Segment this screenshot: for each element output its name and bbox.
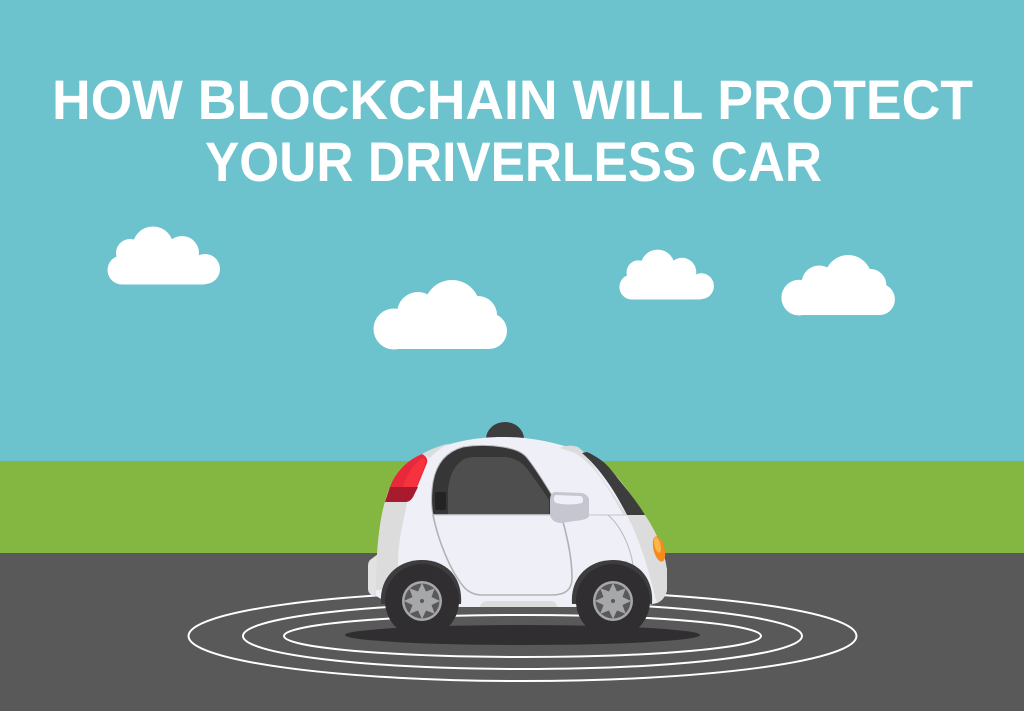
windshield	[582, 452, 645, 515]
title: YOUR DRIVERLESS CAR	[205, 130, 822, 193]
green grass band	[0, 461, 1024, 553]
cloud 3	[619, 250, 714, 299]
rear grey panel	[376, 502, 407, 590]
sky background	[0, 0, 1024, 462]
side window glass	[448, 457, 549, 515]
front panel seam	[608, 515, 633, 565]
door handle	[435, 492, 446, 510]
side window frame	[432, 446, 553, 515]
side step	[480, 601, 557, 607]
side mirror	[550, 492, 589, 523]
driverless car	[368, 422, 667, 638]
hood grey accent	[560, 446, 627, 515]
asphalt road	[0, 553, 1024, 711]
door outline	[433, 515, 572, 595]
rear bumper	[368, 554, 395, 600]
car shadow	[345, 625, 700, 645]
cloud 1	[108, 226, 220, 284]
front indicator light	[651, 535, 667, 563]
front grey panel	[627, 515, 667, 603]
roof sensor dome	[486, 422, 524, 456]
taillight	[385, 454, 427, 502]
cloud 4	[781, 255, 895, 315]
sensor rings on road	[188, 591, 856, 681]
title	[52, 68, 973, 193]
beltline	[433, 514, 627, 516]
cloud 2	[374, 280, 507, 350]
rear wheel	[381, 560, 461, 638]
front wheel	[572, 560, 652, 638]
roof rear grey accent	[422, 443, 450, 458]
title: HOW BLOCKCHAIN WILL PROTECT	[52, 68, 973, 131]
car body	[376, 437, 667, 607]
